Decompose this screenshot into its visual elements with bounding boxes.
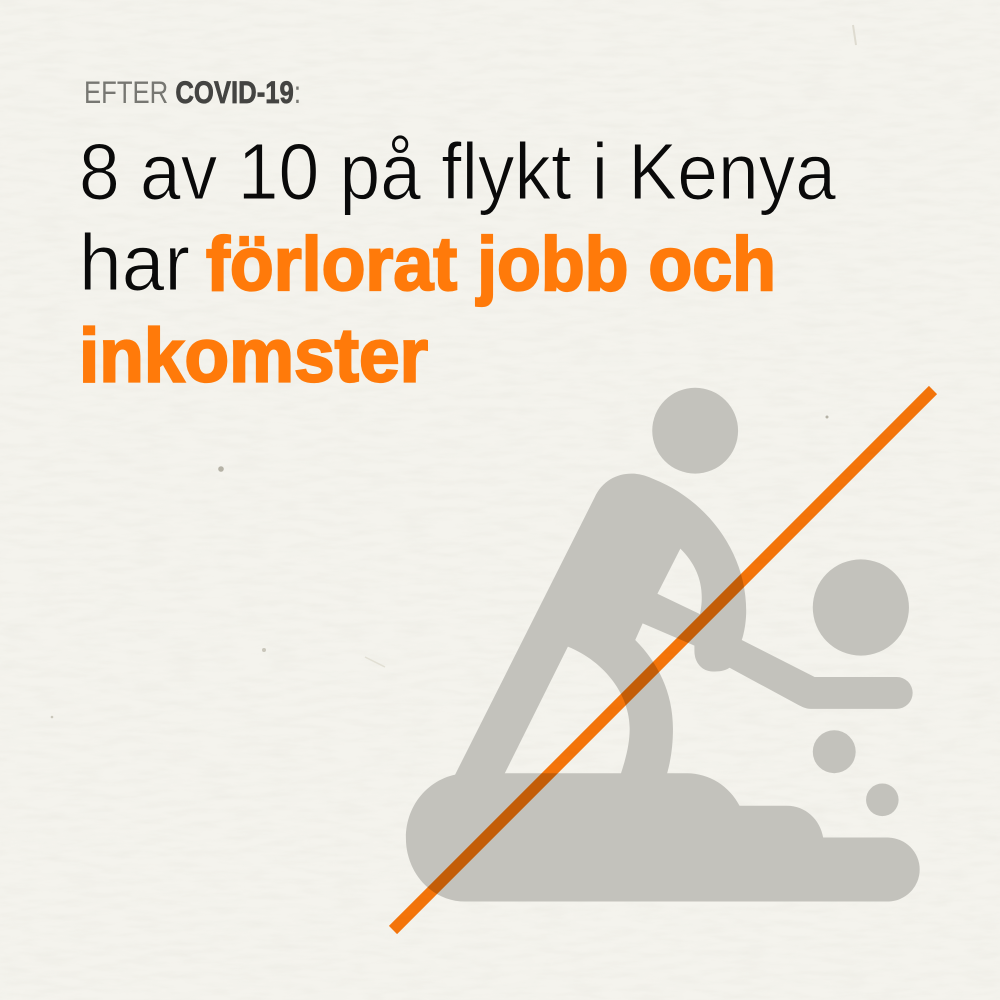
title line 3: orange emphasis: inkomster bbox=[79, 314, 428, 398]
icon: ball of soil large bbox=[813, 559, 909, 656]
title bbox=[79, 127, 836, 398]
icon: body and arms bbox=[454, 474, 913, 777]
kicker: EFTER COVID-19: EFTER COVID-19: bbox=[84, 74, 301, 110]
icon: ball of soil medium bbox=[813, 730, 856, 773]
strike-through line bbox=[393, 390, 933, 930]
title line 2: orange emphasis: förlorat jobb och bbox=[206, 222, 776, 307]
title line 2: regular lead-in: har bbox=[79, 218, 190, 307]
icon: person digging bbox=[406, 388, 920, 902]
title line 1: 8 av 10 på flykt i Kenya bbox=[79, 127, 836, 216]
icon: ground mound bbox=[406, 773, 920, 902]
icon: head bbox=[652, 388, 738, 474]
icon: ball of soil small bbox=[866, 784, 899, 816]
